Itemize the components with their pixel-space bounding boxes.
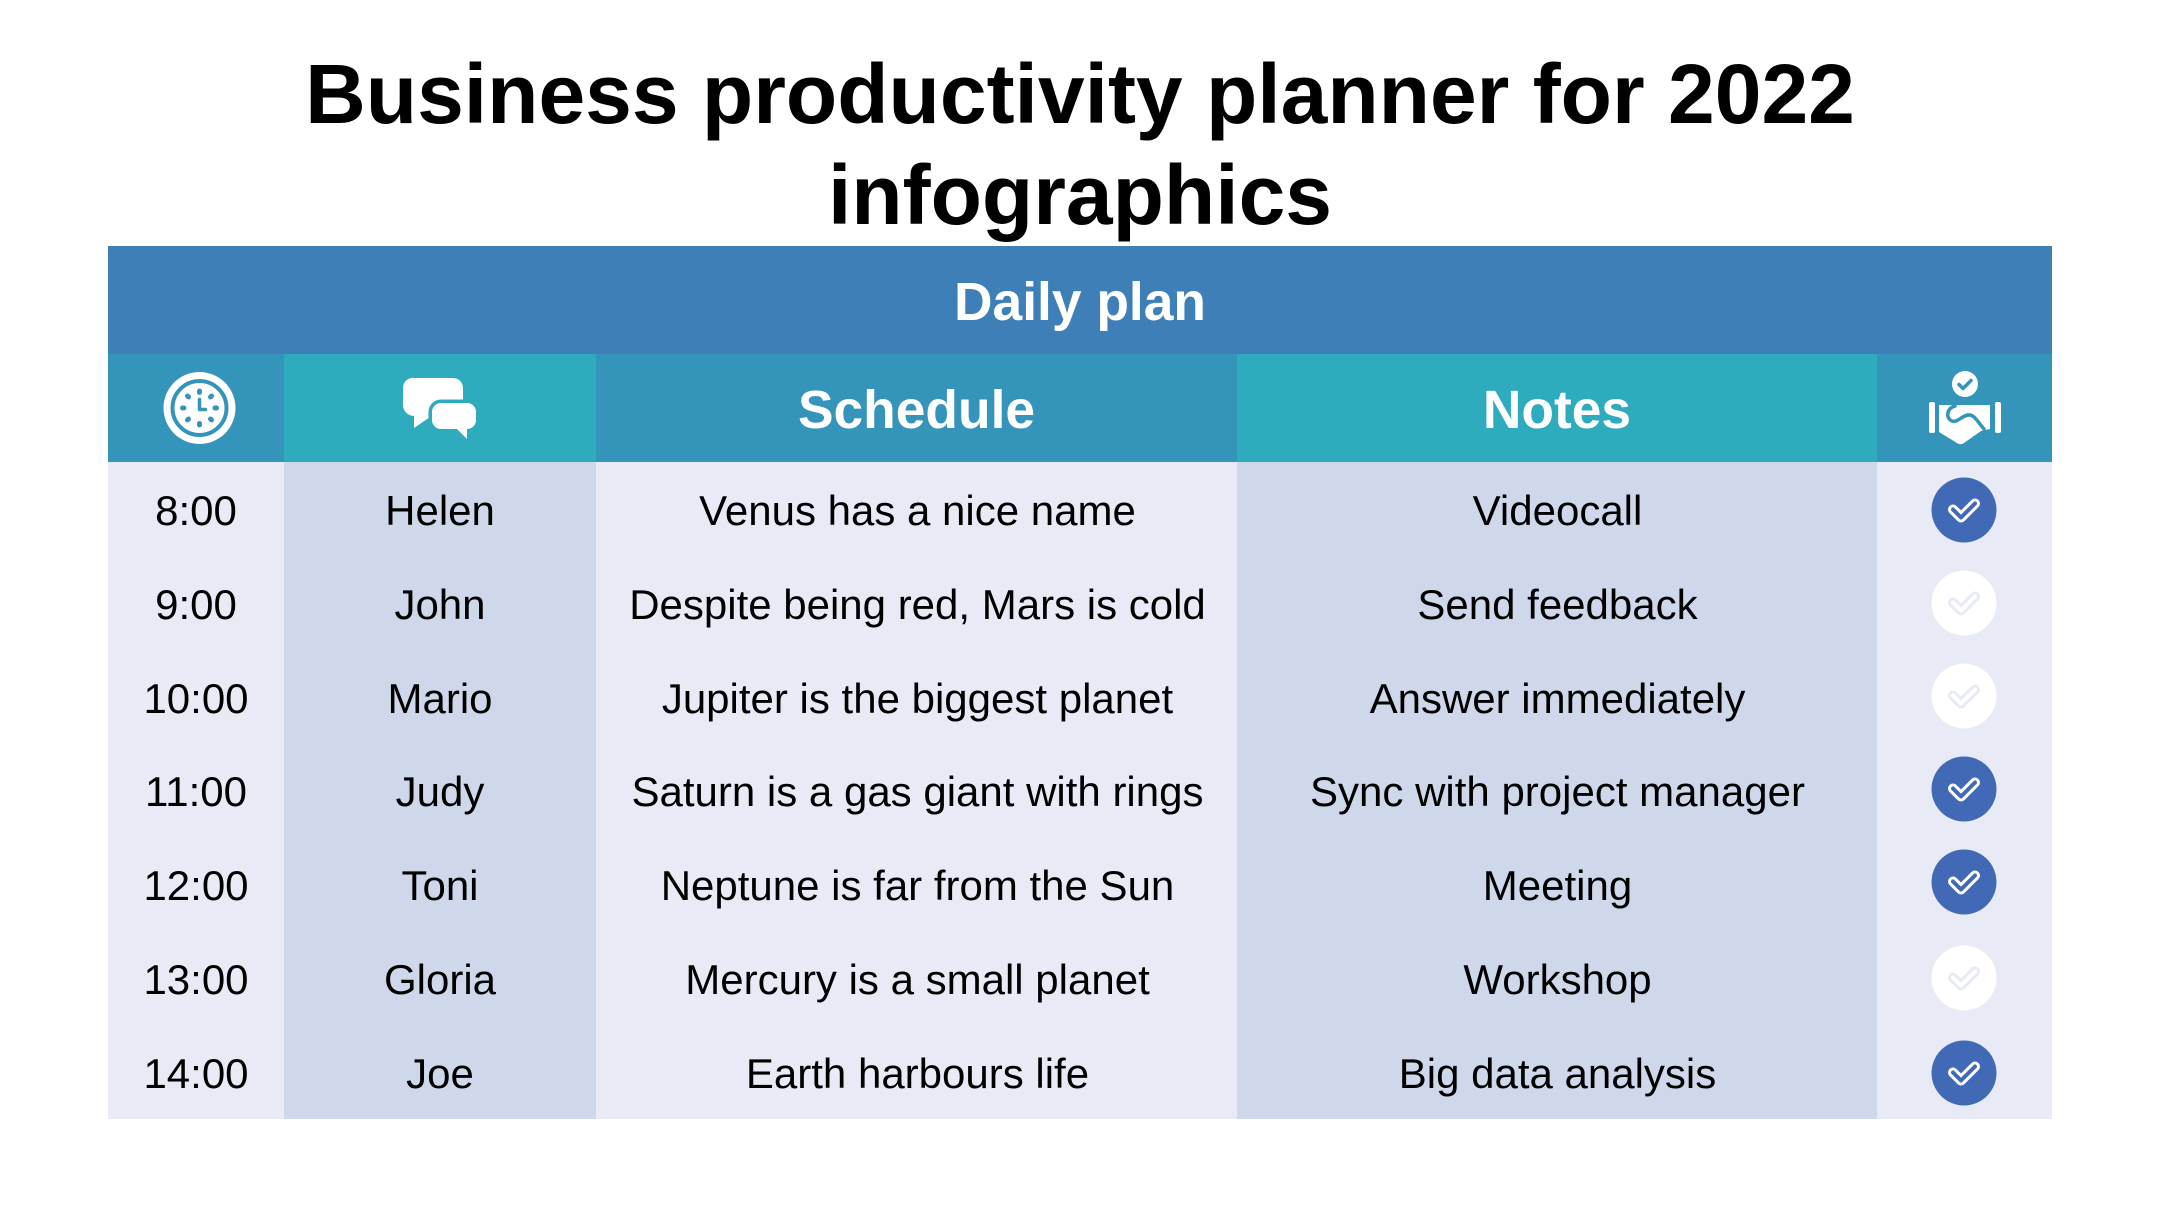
row: 13:00: Gloria xyxy=(384,956,496,1002)
icon: check pending 9:00 xyxy=(1932,570,1996,636)
icon: check pending 10:00 xyxy=(1932,664,1996,728)
panel: daily plan table xyxy=(108,246,2052,1119)
title xyxy=(305,47,1855,242)
row: 12:00: Toni xyxy=(401,862,479,908)
row: 14:00: Earth harbours life xyxy=(746,1050,1089,1096)
header cell: Notes xyxy=(1237,354,1877,462)
row: 8:00: Videocall xyxy=(1473,486,1642,534)
row: 12:00: 12:00 xyxy=(143,862,249,908)
title: infographics xyxy=(828,148,1332,242)
row: 11:00: 11:00 xyxy=(145,768,247,814)
icon: check done 12:00 xyxy=(1932,850,1996,914)
table banner: Daily plan xyxy=(108,246,2052,354)
header cell: Schedule: Schedule xyxy=(798,381,1035,440)
header cell: Schedule xyxy=(596,354,1237,462)
icon: handshake with check xyxy=(1929,371,2001,444)
icon: check done 14:00 xyxy=(1932,1040,1996,1106)
row: 13:00: Workshop xyxy=(1463,956,1652,1002)
row: 14:00: Big data analysis xyxy=(1399,1050,1716,1096)
row: 11:00: Judy xyxy=(396,768,484,814)
row: 9:00 xyxy=(155,580,1698,628)
column background: time xyxy=(108,462,284,1119)
row: 10:00: Jupiter is the biggest planet xyxy=(662,674,1173,722)
row: 8:00: Venus has a nice name xyxy=(699,486,1136,534)
row: 12:00: Meeting xyxy=(1483,862,1632,908)
row: 10:00 xyxy=(143,674,1746,722)
row: 11:00: Sync with project manager xyxy=(1310,768,1805,814)
row: 10:00: Mario xyxy=(387,674,493,722)
row: 9:00: Despite being red, Mars is cold xyxy=(629,580,1206,628)
icon: check pending 13:00 xyxy=(1932,946,1996,1010)
row: 14:00: Joe xyxy=(406,1050,474,1096)
column background: status xyxy=(1877,462,2052,1119)
row: 8:00: 8:00 xyxy=(155,486,237,534)
icon: chat bubbles xyxy=(403,378,476,439)
icon: check done 8:00 xyxy=(1932,478,1996,542)
row: 11:00 xyxy=(145,768,1805,814)
row: 12:00 xyxy=(143,862,1632,908)
row: 9:00: Send feedback xyxy=(1417,580,1698,628)
table banner: Daily plan: Daily plan xyxy=(954,273,1206,332)
row: 8:00 xyxy=(155,486,1642,534)
row: 14:00: 14:00 xyxy=(143,1050,249,1096)
row: 10:00: Answer immediately xyxy=(1370,674,1745,722)
column background: name xyxy=(284,462,596,1119)
icon: clock xyxy=(164,372,236,444)
header cell: handshake xyxy=(1877,354,2052,462)
column background: schedule xyxy=(596,462,1237,1119)
row: 9:00: John xyxy=(394,580,486,628)
row: 13:00 xyxy=(143,956,1652,1002)
row: 8:00: Helen xyxy=(385,486,495,534)
row: 11:00: Saturn is a gas giant with rings xyxy=(632,768,1203,814)
title: Business productivity planner for 2022 xyxy=(305,47,1855,141)
row: 14:00 xyxy=(143,1050,1716,1096)
header cell: clock xyxy=(108,354,284,462)
header cell: chat xyxy=(284,354,596,462)
column background: notes xyxy=(1237,462,1877,1119)
row: 13:00: Mercury is a small planet xyxy=(685,956,1150,1002)
row: 12:00: Neptune is far from the Sun xyxy=(661,862,1174,908)
icon: check done 11:00 xyxy=(1932,756,1996,822)
row: 10:00: 10:00 xyxy=(143,674,249,722)
header cell: Notes: Notes xyxy=(1483,381,1631,440)
row: 9:00: 9:00 xyxy=(155,580,237,628)
row: 13:00: 13:00 xyxy=(143,956,249,1002)
